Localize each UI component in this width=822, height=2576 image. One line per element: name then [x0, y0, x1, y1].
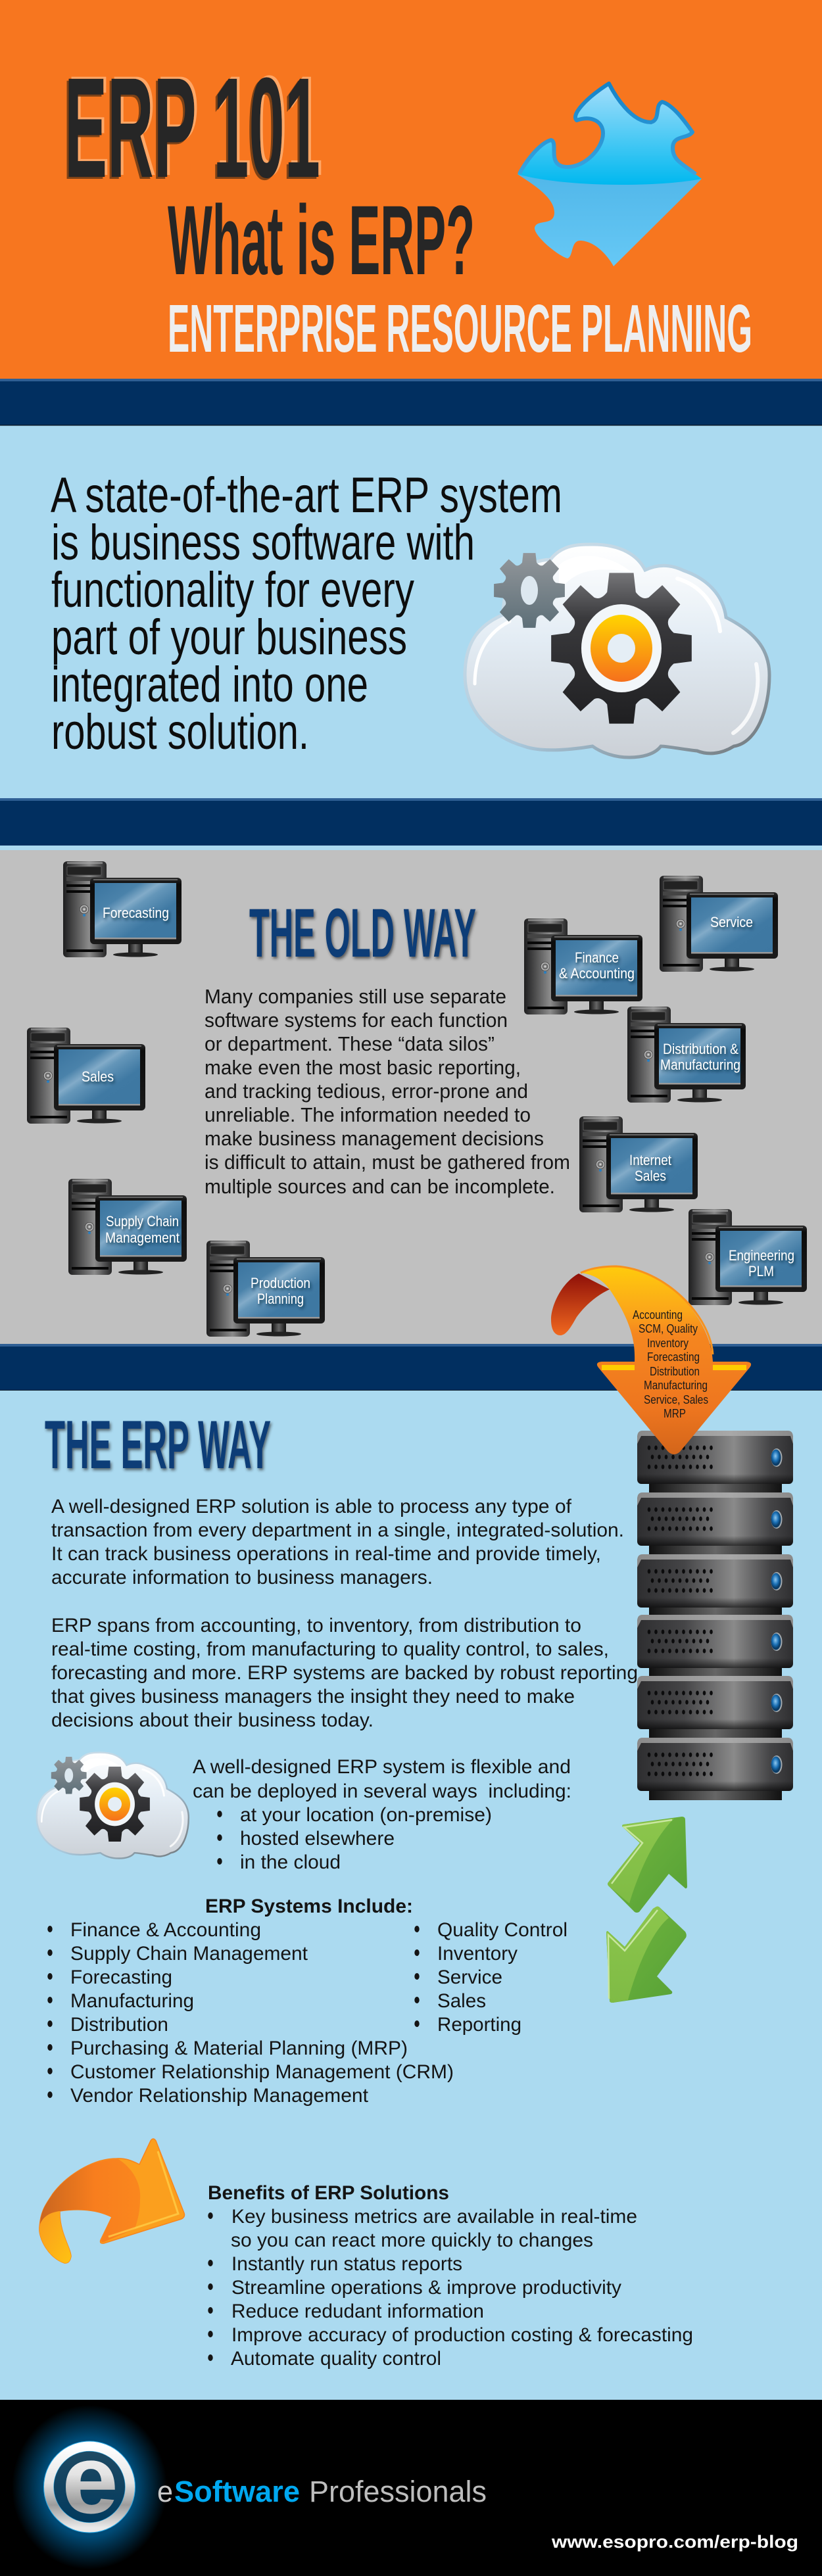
website url: www.esopro.com/erp-blog [551, 2532, 798, 2552]
list: benefits: Streamline operations & improve productivity [231, 2277, 621, 2299]
computer: Internet Sales: Internet [629, 1152, 671, 1168]
text block: intro statement: functionality for every [51, 562, 414, 618]
list: benefits: Instantly run status reports [231, 2253, 462, 2275]
computer: Distribution and Manufacturing [627, 1007, 746, 1103]
brand name: Professionals [309, 2475, 487, 2508]
text block: old way description: unreliable. The information needed to [205, 1103, 531, 1126]
list: benefits: Improve accuracy of production costing & forecasting [231, 2324, 693, 2346]
panel: the old way: THE OLD WAY [249, 895, 476, 972]
panel: header [0, 0, 822, 379]
computer: Production Planning [206, 1241, 325, 1337]
list: ERP systems left column: Purchasing & Material Planning (MRP) [70, 2038, 408, 2059]
text block: arrow modules: Distribution [650, 1364, 700, 1378]
text block: ERP solution description [51, 1496, 624, 1588]
computer: Finance and Accounting [524, 918, 642, 1014]
logo: eSoftware emblem: e [62, 2425, 118, 2534]
panel: intro band [0, 379, 822, 798]
panel: the ERP way: THE ERP WAY [45, 1407, 271, 1483]
text block: deployment options: in the cloud [240, 1851, 341, 1873]
text block: deployment options: hosted elsewhere [240, 1828, 395, 1849]
computer: Supply Chain Management [68, 1179, 187, 1275]
list: ERP systems left column [47, 1919, 454, 2107]
text block: arrow modules: Accounting [633, 1308, 683, 1322]
computer: Supply Chain Management: Management [105, 1229, 180, 1246]
text block: arrow modules: MRP [664, 1406, 686, 1420]
computer: Finance and Accounting: Finance [575, 949, 619, 966]
list: benefits: Reduce redudant information [231, 2301, 484, 2322]
text block: intro statement: A state-of-the-art ERP system [51, 467, 562, 523]
computer: Forecasting: Forecasting [103, 905, 169, 921]
list: benefits: so you can react more quickly to changes [231, 2230, 593, 2251]
text block: intro statement [51, 467, 562, 760]
computer: Distribution and Manufacturing: Manufacturing [660, 1057, 740, 1073]
text block: ERP solution description: It can track business operations in real-time and provide timely, [51, 1543, 601, 1565]
text block: arrow modules: SCM, Quality [639, 1322, 698, 1335]
computer: Internet Sales: Sales [635, 1168, 666, 1184]
computer: Production Planning: Planning [257, 1291, 304, 1307]
logo: eSoftware emblem [12, 2405, 167, 2569]
text block: ERP scope description: decisions about their business today. [51, 1709, 374, 1731]
text block: old way description: or department. These “data silos” [205, 1032, 495, 1055]
icon: green up arrow [608, 1817, 687, 1913]
text block: ERP solution description: transaction from every department in a single, integrated-solution. [51, 1519, 624, 1541]
computer: Service [660, 876, 778, 972]
server stack [637, 1431, 793, 1800]
computer: Production Planning: Production [251, 1275, 310, 1291]
list: ERP systems left column: Finance & Accounting [70, 1919, 261, 1941]
computer: Sales: Sales [82, 1068, 114, 1085]
text block: old way description: software systems for each function [205, 1009, 508, 1032]
list: benefits: Key business metrics are available in real-time [231, 2206, 637, 2228]
list: ERP systems right column [414, 1919, 568, 2036]
list: ERP systems right column: Service [437, 1967, 502, 1988]
brand name: e [157, 2475, 173, 2508]
list: ERP systems left column: Manufacturing [70, 1990, 194, 2012]
heading: ERP Systems Include: ERP Systems Include: [205, 1896, 413, 1917]
text block: deployment options: A well-designed ERP system is flexible and [193, 1756, 571, 1778]
list: ERP systems right column: Reporting [437, 2014, 521, 2036]
computer: Engineering PLM [689, 1209, 807, 1305]
text block: ERP scope description: real-time costing, from manufacturing to quality control, to sales, [51, 1638, 609, 1660]
panel: the old way [0, 798, 822, 1344]
text block: arrow modules: Manufacturing [644, 1378, 708, 1392]
text block: deployment options: at your location (on-premise) [240, 1804, 492, 1826]
text block: intro statement: is business software with [51, 515, 475, 571]
text block: old way description: is difficult to attain, must be gathered from [205, 1151, 570, 1174]
text block: intro statement: integrated into one [51, 657, 368, 713]
text block: intro statement: part of your business [51, 609, 407, 665]
arrow: orange arrow from old way into server [551, 1266, 751, 1454]
text block: ERP scope description [51, 1615, 638, 1731]
list: benefits: Automate quality control [231, 2348, 441, 2370]
text block: old way description: and tracking tedious, error-prone and [205, 1080, 528, 1103]
text block: ERP scope description: forecasting and more. ERP systems are backed by robust reporting [51, 1662, 638, 1684]
computer: Internet Sales [579, 1116, 698, 1212]
text block: old way description [205, 985, 570, 1198]
computer: Supply Chain Management: Supply Chain [106, 1213, 179, 1229]
icon: small cloud with gears [37, 1753, 189, 1859]
computer: Forecasting [63, 861, 181, 957]
text block: old way description: make business management decisions [205, 1127, 544, 1150]
computer: Service: Service [710, 914, 753, 930]
text block: old way description: multiple sources and can be incomplete. [205, 1175, 555, 1198]
list: ERP systems left column: Supply Chain Management [70, 1943, 308, 1965]
list: ERP systems left column: Customer Relationship Management (CRM) [70, 2061, 454, 2083]
text block: deployment options [193, 1756, 571, 1873]
list: ERP systems right column: Sales [437, 1990, 486, 2012]
icon: cloud with gears [465, 544, 769, 757]
panel: footer [0, 2400, 822, 2576]
list: ERP systems left column: Forecasting [70, 1967, 172, 1988]
text block: ERP scope description: ERP spans from accounting, to inventory, from distribution to [51, 1615, 581, 1636]
brand name [157, 2475, 487, 2508]
heading: benefits: Benefits of ERP Solutions [208, 2182, 449, 2204]
computer: Distribution and Manufacturing: Distribution & [663, 1041, 738, 1057]
text block: ERP solution description: accurate information to business managers. [51, 1567, 433, 1588]
text block: ERP scope description: that gives business managers the insight they need to make [51, 1686, 575, 1707]
icon: blue puzzle piece [518, 83, 702, 266]
icon: orange curved arrow [39, 2139, 185, 2263]
text block: arrow modules: Service, Sales [644, 1393, 708, 1406]
text block: arrow modules: Inventory [647, 1336, 689, 1350]
brand name: Software [174, 2475, 300, 2508]
computer: Sales [27, 1028, 145, 1124]
list: ERP systems left column: Vendor Relationship Management [70, 2085, 369, 2107]
panel: header: What is ERP? [168, 185, 475, 295]
list: ERP systems right column: Inventory [437, 1943, 518, 1965]
list: ERP systems right column: Quality Control [437, 1919, 568, 1941]
panel: header: ERP 101 [64, 48, 320, 207]
icon: green down arrow [606, 1907, 687, 2003]
text block: deployment options: can be deployed in several ways including: [193, 1780, 571, 1802]
computer: Engineering PLM: PLM [748, 1263, 774, 1279]
panel: the ERP way [0, 1344, 822, 2400]
list: ERP systems left column: Distribution [70, 2014, 168, 2036]
text block: old way description: Many companies still use separate [205, 985, 506, 1008]
computer: Finance and Accounting: & Accounting [559, 965, 635, 982]
text block: old way description: make even the most basic reporting, [205, 1056, 521, 1079]
text block: arrow modules [633, 1308, 708, 1420]
text block: ERP solution description: A well-designed ERP solution is able to process any type of [51, 1496, 572, 1517]
computer: Engineering PLM: Engineering [729, 1247, 794, 1264]
list: benefits [208, 2206, 693, 2370]
text block: intro statement: robust solution. [51, 704, 309, 760]
text block: arrow modules: Forecasting [647, 1350, 700, 1364]
